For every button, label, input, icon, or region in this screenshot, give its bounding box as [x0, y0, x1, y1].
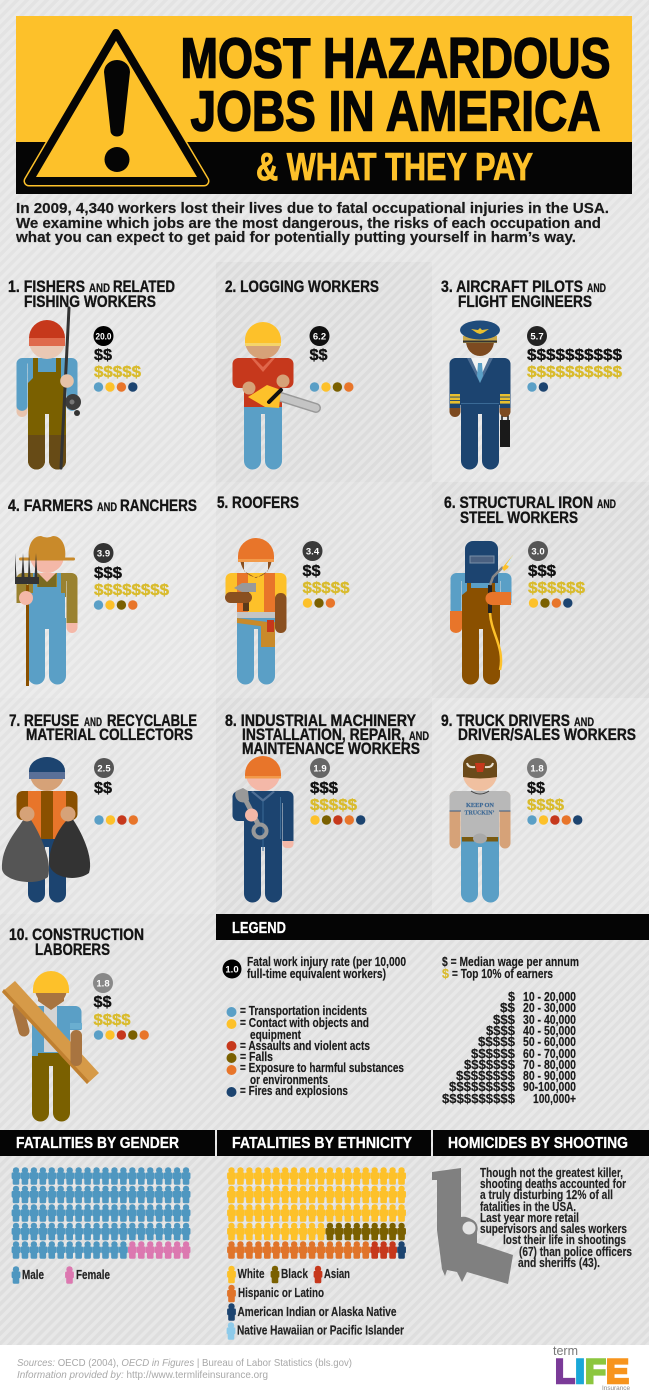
hazard colour key: = Exposure to harmful substances — [240, 1061, 404, 1075]
rate badge: 3.4 — [306, 546, 320, 558]
median wage: $$$ — [528, 563, 556, 580]
sources — [17, 1357, 352, 1381]
rate key: 1.0 — [225, 964, 239, 976]
figure: logger — [232, 322, 316, 470]
rate badge: 2.5 — [97, 764, 111, 774]
heading: FATALITIES BY ETHNICITY — [232, 1135, 412, 1152]
risk dots — [527, 382, 548, 392]
figure: truck driver — [450, 754, 510, 902]
panel: legend — [216, 914, 649, 1106]
panel: 8 machinery — [225, 712, 429, 902]
shooting text: Last year more retail — [480, 1211, 579, 1225]
heading: 8. INDUSTRIAL MACHINERY — [225, 712, 416, 730]
ethnicity key — [227, 1266, 404, 1340]
median wage: $$ — [302, 563, 321, 580]
risk dots — [94, 382, 138, 392]
wage scale table: 20 - 30,000 — [523, 1001, 576, 1015]
rate key: full-time equivalent workers) — [247, 967, 386, 981]
risk dots — [527, 815, 582, 825]
heading: 3. AIRCRAFT PILOTS — [441, 278, 583, 296]
wage scale table: 30 - 40,000 — [523, 1013, 576, 1027]
rate key: Fatal work injury rate (per 10,000 — [247, 955, 406, 969]
wage scale table: 40 - 50,000 — [523, 1024, 576, 1038]
legend heading — [216, 914, 649, 940]
wage scale table: $$$$$$ — [471, 1047, 515, 1061]
risk dots — [94, 815, 138, 825]
panel: 6 iron workers — [444, 494, 616, 684]
wage scale table: 50 - 60,000 — [523, 1035, 576, 1049]
wage scale table: 60 - 70,000 — [523, 1047, 576, 1061]
header banner — [16, 16, 632, 194]
heading: AND — [409, 731, 429, 743]
icon: warning triangle — [29, 33, 204, 181]
wage scale table: 80 - 90,000 — [523, 1069, 576, 1083]
rate badge: 6.2 — [313, 332, 326, 342]
heading: AND — [89, 283, 110, 295]
heading — [9, 712, 197, 744]
risk dots — [310, 382, 353, 392]
top earners wage: $$$$$ — [94, 364, 141, 381]
figure: welder — [450, 541, 513, 684]
wage scale table: $ — [508, 990, 515, 1004]
panel: fatalities by ethnicity — [217, 1130, 431, 1340]
rate badge — [310, 326, 330, 346]
ethnicity key: Black — [281, 1267, 308, 1281]
rate badge — [310, 758, 330, 778]
panel: 7 refuse — [2, 712, 197, 902]
logo — [553, 1343, 631, 1392]
hazard colour key — [226, 1004, 404, 1098]
ethnicity key: Hispanic or Latino — [238, 1286, 324, 1300]
heading — [433, 1130, 649, 1156]
median wage: $$$$$$$$$$ — [527, 347, 622, 364]
subtitle: & WHAT THEY PAY — [256, 146, 533, 189]
median wage: $$$ — [310, 780, 338, 797]
hazard colour key: = Contact with objects and — [240, 1016, 369, 1030]
wage key — [442, 955, 579, 981]
rate badge: 3.9 — [97, 548, 110, 560]
sources: Information provided by: http://www.termlifeinsurance.org — [17, 1369, 268, 1381]
top earners wage: $$$$$$ — [528, 580, 585, 597]
heading: INSTALLATION, REPAIR, — [242, 726, 405, 744]
panel: fatalities by gender — [0, 1130, 215, 1284]
heading: FLIGHT ENGINEERS — [458, 293, 592, 311]
heading: 1. FISHERS — [8, 278, 85, 296]
risk dots — [310, 815, 365, 825]
risk dots — [94, 1030, 149, 1040]
heading: 5. ROOFERS — [217, 494, 299, 512]
hazard colour key: = Fires and explosions — [240, 1084, 348, 1098]
logo: I — [575, 1353, 585, 1391]
panel: 2 logging — [225, 278, 379, 470]
heading: RANCHERS — [120, 497, 197, 515]
heading: STEEL WORKERS — [460, 509, 578, 527]
top earners wage: $$$$ — [527, 797, 564, 814]
intro text: what you can expect to get paid for potentially putting yourself in harm’s way. — [15, 229, 576, 246]
median wage: $$ — [310, 347, 328, 364]
heading: 4. FARMERS — [8, 497, 93, 515]
heading — [441, 278, 606, 311]
top earners wage: $$$$$ — [302, 580, 350, 597]
rate badge: 3.0 — [531, 546, 545, 558]
heading: MAINTENANCE WORKERS — [242, 740, 420, 758]
heading — [441, 712, 636, 744]
logo: Insurance — [602, 1386, 631, 1392]
shirt slogan: TRUCKIN’ — [464, 810, 494, 816]
top earners wage: $$$$$$$$$$ — [527, 364, 622, 381]
panel: 1 fishers — [8, 278, 175, 470]
wage scale table: 70 - 80,000 — [523, 1058, 576, 1072]
wage scale table: 90-100,000 — [523, 1080, 576, 1094]
heading: AND — [97, 502, 117, 514]
wage scale table: $$$$$$$ — [464, 1058, 515, 1072]
figure: roofer — [225, 538, 286, 684]
heading: 9. TRUCK DRIVERS — [441, 712, 570, 730]
figure: pilot — [450, 320, 510, 470]
median wage: $$$ — [94, 565, 122, 582]
rate key — [222, 955, 406, 981]
top earners wage: $$$$$ — [310, 797, 357, 814]
intro text — [15, 200, 609, 246]
median wage: $$ — [94, 347, 112, 364]
panel shading: checkerboard — [0, 262, 649, 1345]
rate badge — [302, 541, 322, 561]
shooting text: a truly disturbing 12% of all — [480, 1188, 613, 1202]
heading: MATERIAL COLLECTORS — [26, 726, 193, 744]
heading: 7. REFUSE — [9, 712, 79, 730]
heading — [8, 497, 197, 515]
heading: AND — [84, 717, 102, 729]
logo: F — [585, 1353, 606, 1391]
top earners wage: $$$$$$$$ — [94, 582, 169, 599]
rate badge — [527, 326, 547, 346]
logo: L — [555, 1353, 575, 1391]
heading: AND — [597, 499, 616, 511]
rate badge — [528, 541, 548, 561]
wage scale table: $$$$ — [486, 1024, 515, 1038]
shirt slogan — [464, 802, 494, 816]
figure: fisher — [16, 308, 81, 470]
heading: 6. STRUCTURAL IRON — [444, 494, 593, 512]
hazard colour key: = Falls — [240, 1050, 273, 1064]
wage scale table: $$$ — [493, 1013, 515, 1027]
risk dots — [303, 598, 335, 608]
figure: mechanic — [232, 756, 294, 902]
heading: FISHING WORKERS — [24, 293, 156, 311]
panel: 4 farmers — [8, 497, 197, 686]
rate badge — [94, 758, 114, 778]
heading: RECYCLABLE — [107, 712, 197, 730]
wage scale table: 10 - 20,000 — [523, 990, 576, 1004]
wage scale table — [442, 990, 576, 1106]
icon: pistol — [432, 1168, 513, 1284]
panel: 9 truck drivers — [441, 712, 636, 902]
heading: LABORERS — [35, 941, 110, 959]
panel: 5 roofers — [217, 494, 350, 684]
heading — [8, 278, 175, 311]
heading: HOMICIDES BY SHOOTING — [448, 1135, 628, 1152]
ethnicity key: American Indian or Alaska Native — [238, 1305, 397, 1319]
hazard colour key: = Assaults and violent acts — [240, 1039, 370, 1053]
rate badge — [93, 973, 113, 993]
hazard colour key: or environments — [250, 1073, 328, 1087]
gender key — [12, 1266, 110, 1284]
shirt slogan: KEEP ON — [466, 802, 494, 809]
heading — [217, 1130, 431, 1156]
gender key: Female — [76, 1268, 110, 1282]
top earners wage: $$$$ — [94, 1012, 131, 1029]
hazard colour key: = Transportation incidents — [240, 1004, 367, 1018]
intro text: In 2009, 4,340 workers lost their lives due to fatal occupational injuries in the USA. — [16, 200, 609, 217]
panel: homicides by shooting — [432, 1130, 649, 1284]
ethnicity key: Native Hawaiian or Pacific Islander — [237, 1324, 404, 1338]
heading: RELATED — [113, 278, 175, 296]
rate badge — [527, 758, 547, 778]
shooting text: fatalities in the USA. — [480, 1200, 576, 1214]
logo: term — [553, 1343, 578, 1358]
heading: AND — [587, 283, 606, 295]
hazard colour key: equipment — [250, 1028, 302, 1042]
wage scale table: $$ — [500, 1001, 515, 1015]
heading — [0, 1130, 215, 1156]
risk dots — [529, 598, 572, 608]
ethnicity key: Asian — [324, 1267, 350, 1281]
rate badge — [94, 543, 114, 563]
gender key: Male — [22, 1268, 44, 1282]
wage key: = Top 10% of earners — [452, 967, 553, 981]
rate badge: 5.7 — [530, 332, 544, 342]
wage scale table: $$$$$ — [478, 1035, 515, 1049]
panel: 10 construction — [2, 926, 149, 1122]
shooting text — [480, 1166, 632, 1270]
figure: construction laborer — [2, 971, 99, 1122]
ethnicity key: White — [238, 1267, 265, 1281]
wage scale table: 100,000+ — [533, 1092, 576, 1106]
heading: 10. CONSTRUCTION — [9, 926, 144, 944]
median wage: $$ — [94, 780, 112, 797]
rate badge: 20.0 — [96, 332, 112, 342]
rate badge: 1.8 — [530, 764, 544, 774]
wage key: $ — [442, 967, 449, 981]
panel: 3 pilots — [441, 278, 622, 470]
risk dots — [94, 600, 138, 610]
rate badge: 1.8 — [96, 978, 110, 990]
logo: E — [606, 1353, 629, 1391]
heading — [444, 494, 616, 527]
legend heading: LEGEND — [232, 920, 286, 937]
rate badge: 1.9 — [313, 764, 327, 774]
wage scale table: $$$$$$$$$$ — [442, 1092, 515, 1106]
pictogram: gender — [12, 1167, 190, 1259]
heading — [9, 926, 144, 959]
footer — [0, 1343, 649, 1394]
wage key: $ = Median wage per annum — [442, 955, 579, 969]
intro text: We examine which jobs are the most dangerous, the risks of each occupation and — [16, 215, 601, 232]
median wage: $$ — [527, 780, 545, 797]
heading: AND — [574, 717, 594, 729]
pictogram: ethnicity — [227, 1167, 406, 1259]
heading: FATALITIES BY GENDER — [16, 1135, 179, 1152]
heading — [225, 712, 429, 758]
heading: 2. LOGGING WORKERS — [225, 278, 379, 296]
shooting text: and sheriffs (43). — [518, 1256, 600, 1270]
figure: farmer — [15, 536, 78, 686]
figure: refuse collector — [2, 757, 90, 902]
wage scale table: $$$$$$$$$ — [449, 1080, 515, 1094]
title — [180, 26, 610, 144]
median wage: $$ — [94, 994, 112, 1011]
wage scale table: $$$$$$$$ — [456, 1069, 515, 1083]
rate badge — [94, 326, 114, 346]
sources: Sources: OECD (2004), OECD in Figures | Bureau of Labor Statistics (bls.gov) — [17, 1357, 352, 1369]
